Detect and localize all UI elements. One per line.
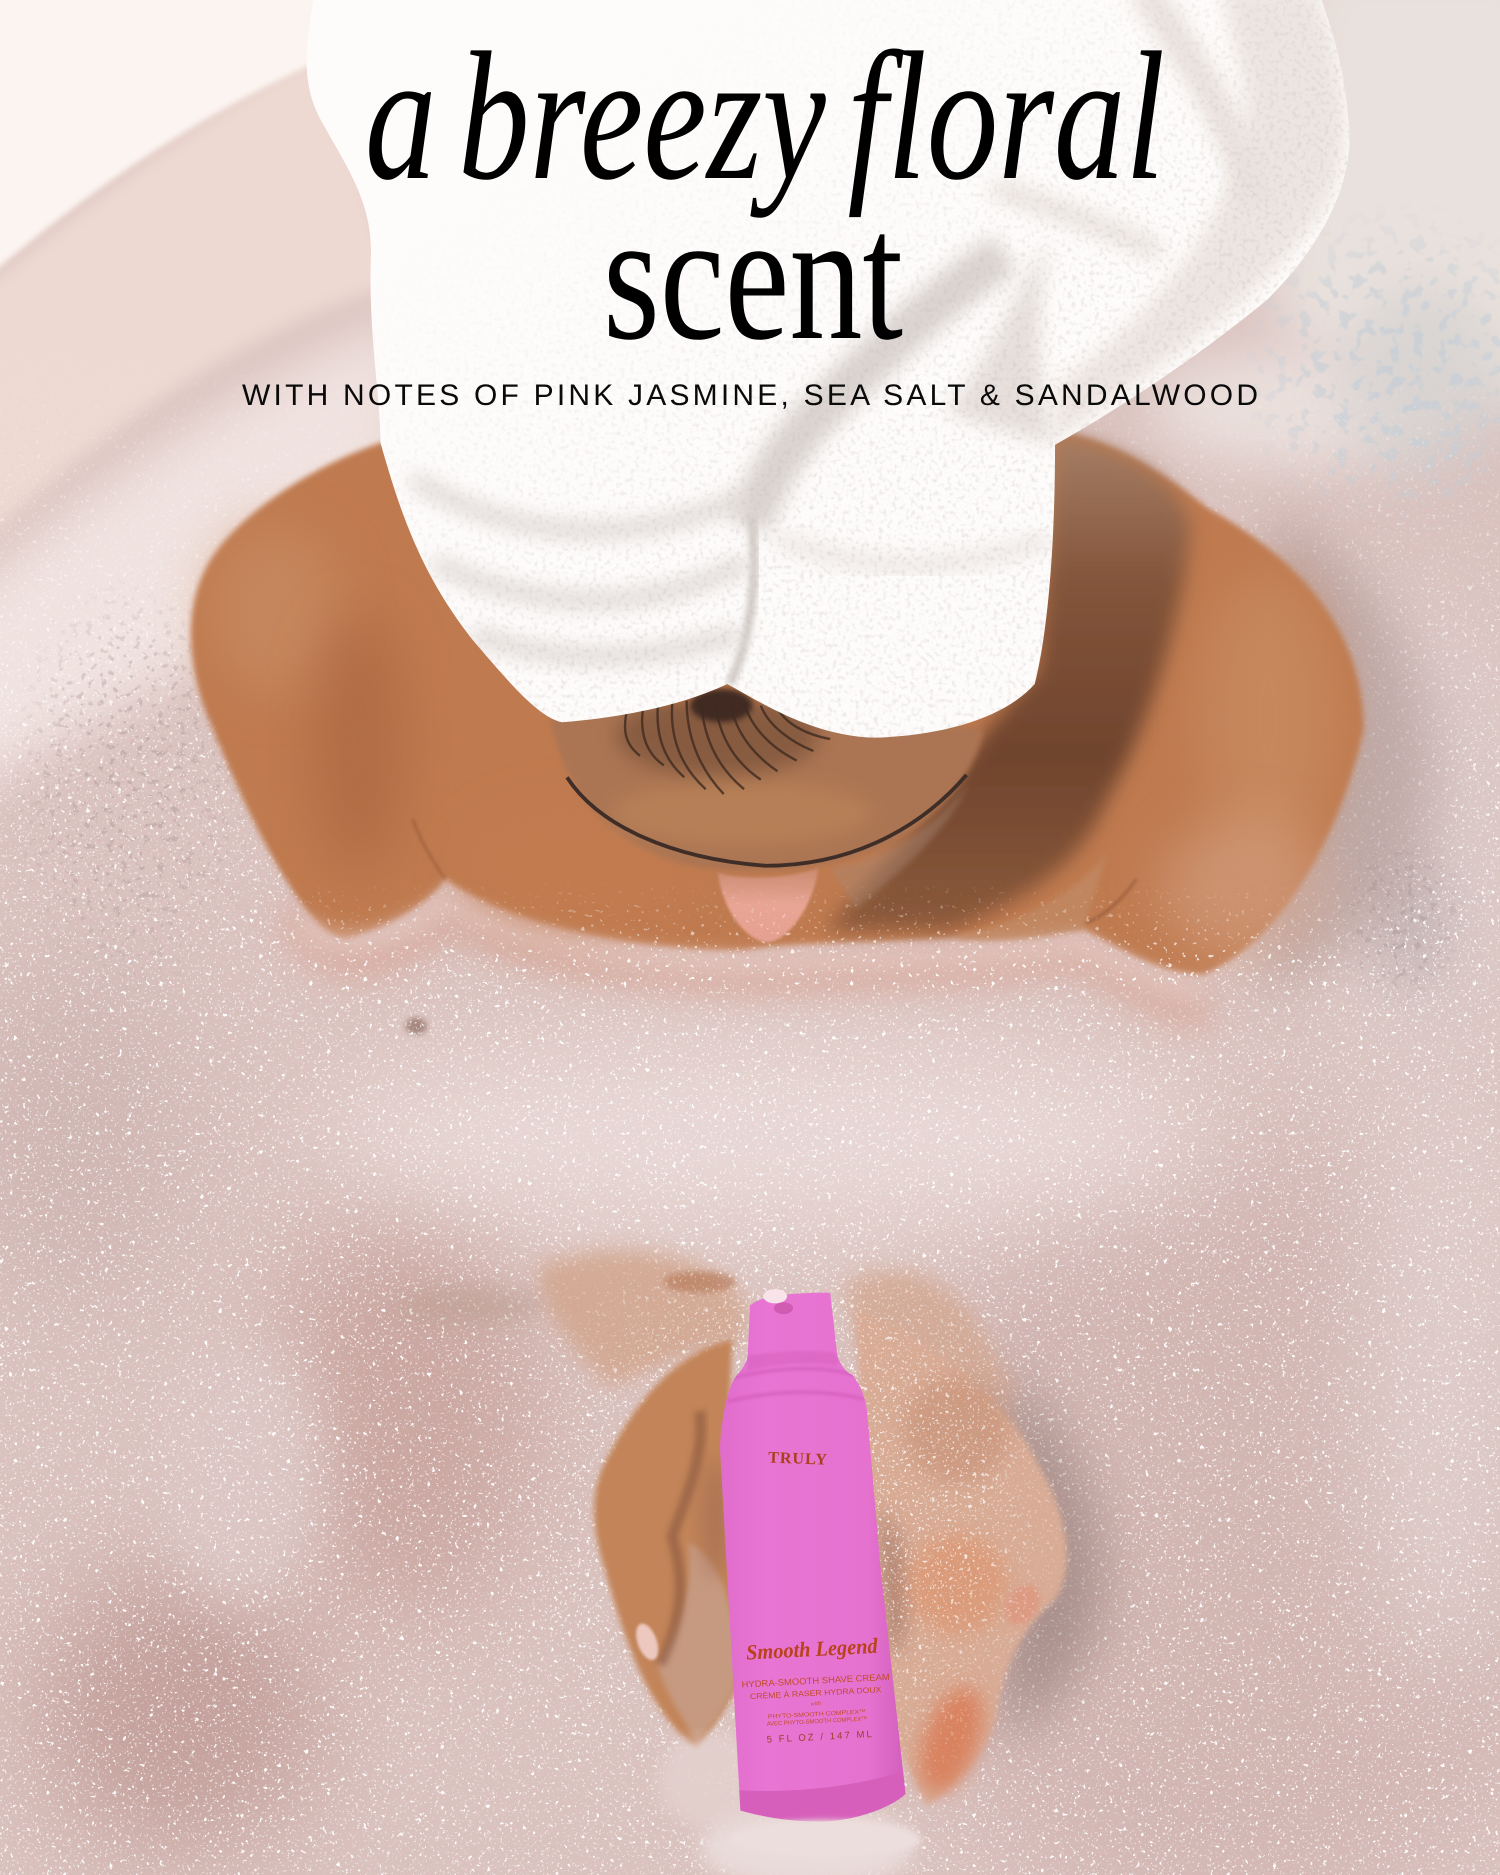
tub rim (0, 0, 383, 287)
label: brand: TRULY (768, 1450, 828, 1469)
tub wall (0, 36, 395, 574)
left hand shape (594, 1339, 744, 1748)
right finger (907, 1679, 995, 1801)
fold shade right lobe (778, 538, 1050, 565)
label: complex: PHYTO-SMOOTH COMPLEX™ (768, 1708, 866, 1721)
shoulder ridges (727, 1369, 864, 1401)
strap line (567, 775, 967, 866)
towel shadow neck (945, 239, 1055, 445)
towel fold cross band (993, 187, 1160, 254)
label: product: HYDRA-SMOOTH SHAVE CREAM (741, 1672, 890, 1690)
chest warm (467, 813, 682, 933)
shoulders (191, 430, 1364, 975)
towel terry texture (287, 0, 1388, 765)
fold lines left lobe (413, 478, 748, 656)
bottle body (720, 1293, 906, 1821)
foam over bottle base (730, 1820, 921, 1858)
bottom band (739, 1770, 909, 1824)
towel fold top right band (1130, 0, 1246, 178)
face shine (610, 780, 873, 847)
dark spot on hand foam (664, 1271, 736, 1293)
arm crease right (1086, 879, 1136, 923)
shoulder highlight right (1202, 574, 1334, 861)
left second finger tone (658, 1543, 739, 1740)
label: french: CRÈME À RASER HYDRA DOUX (750, 1685, 882, 1701)
pink halo below shoulders (293, 909, 1208, 1010)
lit chest patch (957, 855, 1106, 941)
chest shadow right (825, 433, 1190, 930)
arm foam right (1160, 819, 1328, 963)
bubbles upper right haze (1340, 287, 1500, 478)
label: volume: 5 FL OZ / 147 ML (766, 1729, 872, 1746)
neck shade (748, 1351, 837, 1370)
title line two: scent (603, 174, 903, 378)
face (550, 706, 983, 871)
shoulder bottom edge sparkles (240, 880, 1340, 990)
cream dab (763, 1289, 787, 1303)
right hand warm patch (907, 1534, 1007, 1635)
towel lobe gap (730, 514, 754, 684)
hand foam upper left (538, 1250, 748, 1387)
hair strands (625, 701, 830, 794)
foam over left hand base (658, 1734, 778, 1830)
shade beside bottle (879, 1507, 907, 1650)
right hand brown (903, 1375, 1011, 1483)
foam at left hand tip (675, 1741, 737, 1775)
dark bubbles left (22, 596, 234, 964)
hand sparkles bright (400, 1200, 1120, 1840)
label: name: Smooth Legend (746, 1634, 879, 1665)
fingernail (632, 1621, 663, 1663)
hand sparkles fine (400, 1200, 1120, 1840)
hair haze (616, 695, 819, 776)
foam shadow around shoulders (1196, 514, 1435, 993)
left finger crease (660, 1411, 701, 1665)
foam around bottle base (700, 1807, 915, 1875)
left hand (594, 1339, 744, 1775)
arm crease left (413, 819, 445, 879)
title line one: a breezy floral (365, 14, 1165, 218)
hair dark core (690, 689, 752, 722)
towel (287, 0, 1388, 765)
nose (718, 868, 818, 942)
upper right mid foam (1148, 347, 1459, 466)
dark bubbles right (1352, 864, 1456, 990)
arm shade left (313, 610, 404, 873)
right fingertip (999, 1578, 1047, 1631)
label: with: with (810, 1701, 821, 1707)
shoulder highlight left (209, 526, 341, 694)
upper left foam (0, 311, 407, 813)
foam over chest edge (299, 903, 1202, 993)
towel fold far right shade (1053, 0, 1345, 442)
subheading: WITH NOTES OF PINK JASMINE, SEA SALT & SANDALWOOD (242, 379, 1258, 412)
spot in foam (406, 1018, 427, 1034)
upper right tub (1268, 0, 1500, 407)
left palm shade (701, 1459, 730, 1578)
towel shadow centre (749, 254, 1005, 526)
bubbles right low haze (1376, 849, 1447, 993)
label: complex french: AVEC PHYTO-SMOOTH COMPLEX™ (767, 1716, 867, 1728)
shadow right of hand (999, 1363, 1104, 1740)
right hand (855, 1309, 1067, 1806)
right hand and foam (401, 1250, 1104, 1875)
person: shoulders, head and towel (191, 0, 1435, 1010)
blue bubbles right (1259, 228, 1500, 495)
veil right of chin (831, 783, 969, 909)
nozzle (774, 1302, 793, 1314)
hand foam left speckle (401, 1287, 544, 1325)
bottle (720, 1289, 921, 1858)
hand foam upper right (843, 1271, 1017, 1399)
